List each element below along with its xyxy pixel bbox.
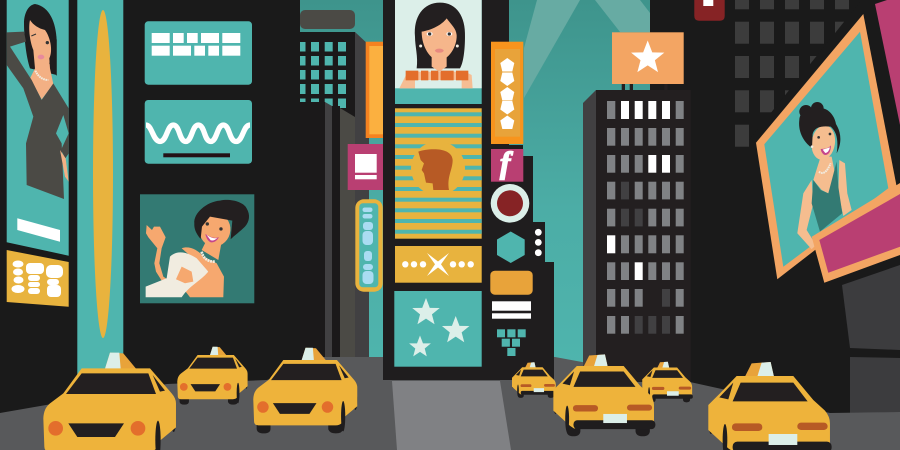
taxi medium rear bbox=[553, 354, 655, 436]
left billboard bbox=[7, 0, 69, 256]
star rooftop sign bbox=[612, 32, 684, 90]
teal column with yellow ellipse bbox=[77, 0, 123, 384]
right background black block bbox=[650, 0, 900, 413]
wave panel bbox=[145, 100, 252, 164]
taxi large rear bbox=[708, 362, 832, 450]
magenta side sign bbox=[348, 144, 383, 190]
white caption bar bbox=[17, 218, 60, 242]
woman in white dress panel bbox=[140, 194, 254, 303]
woman in grey dress bbox=[7, 4, 69, 199]
billboard shadow mass bbox=[749, 0, 900, 300]
front grey building bbox=[300, 102, 369, 360]
taxi medium front bbox=[253, 348, 357, 433]
pill sign bbox=[355, 199, 383, 292]
back building with teal windows bbox=[300, 10, 370, 138]
red dot circle bbox=[491, 184, 529, 223]
back tower windows bbox=[735, 0, 849, 147]
teal square triangle bbox=[497, 329, 526, 356]
hexagon bbox=[497, 232, 525, 263]
taxi small rear right bbox=[642, 362, 693, 402]
magenta logo sign bbox=[491, 145, 523, 182]
office tower bbox=[596, 90, 691, 382]
orange pentagon sign bbox=[491, 42, 523, 144]
stars panel bbox=[394, 291, 482, 367]
orange side sign bbox=[366, 42, 383, 138]
teal sky bbox=[300, 0, 650, 380]
yellow dots and cross panel bbox=[395, 246, 482, 283]
brick panel bbox=[145, 21, 252, 85]
yellow sign with blobs bbox=[7, 250, 69, 307]
taxi small rear bbox=[512, 362, 556, 398]
white bars bbox=[492, 301, 531, 319]
central sign tower bbox=[383, 0, 554, 380]
right grey tower side bbox=[583, 90, 596, 382]
taxi small front bbox=[177, 347, 248, 405]
taxi large front bbox=[43, 353, 176, 450]
magenta logo sign: f bbox=[500, 145, 513, 180]
woman in teal dress bbox=[797, 102, 852, 249]
three dots bbox=[535, 229, 542, 256]
portrait panel bbox=[395, 0, 482, 104]
woman portrait bbox=[399, 3, 473, 88]
light beams bbox=[524, 0, 650, 98]
striped profile panel bbox=[395, 108, 482, 239]
rounded orange block bbox=[490, 271, 533, 295]
grey lower panels bbox=[842, 265, 900, 413]
right billboard bbox=[756, 0, 900, 283]
light centre road bbox=[392, 381, 511, 450]
road bbox=[0, 357, 900, 450]
dark red sign bbox=[694, 0, 725, 21]
